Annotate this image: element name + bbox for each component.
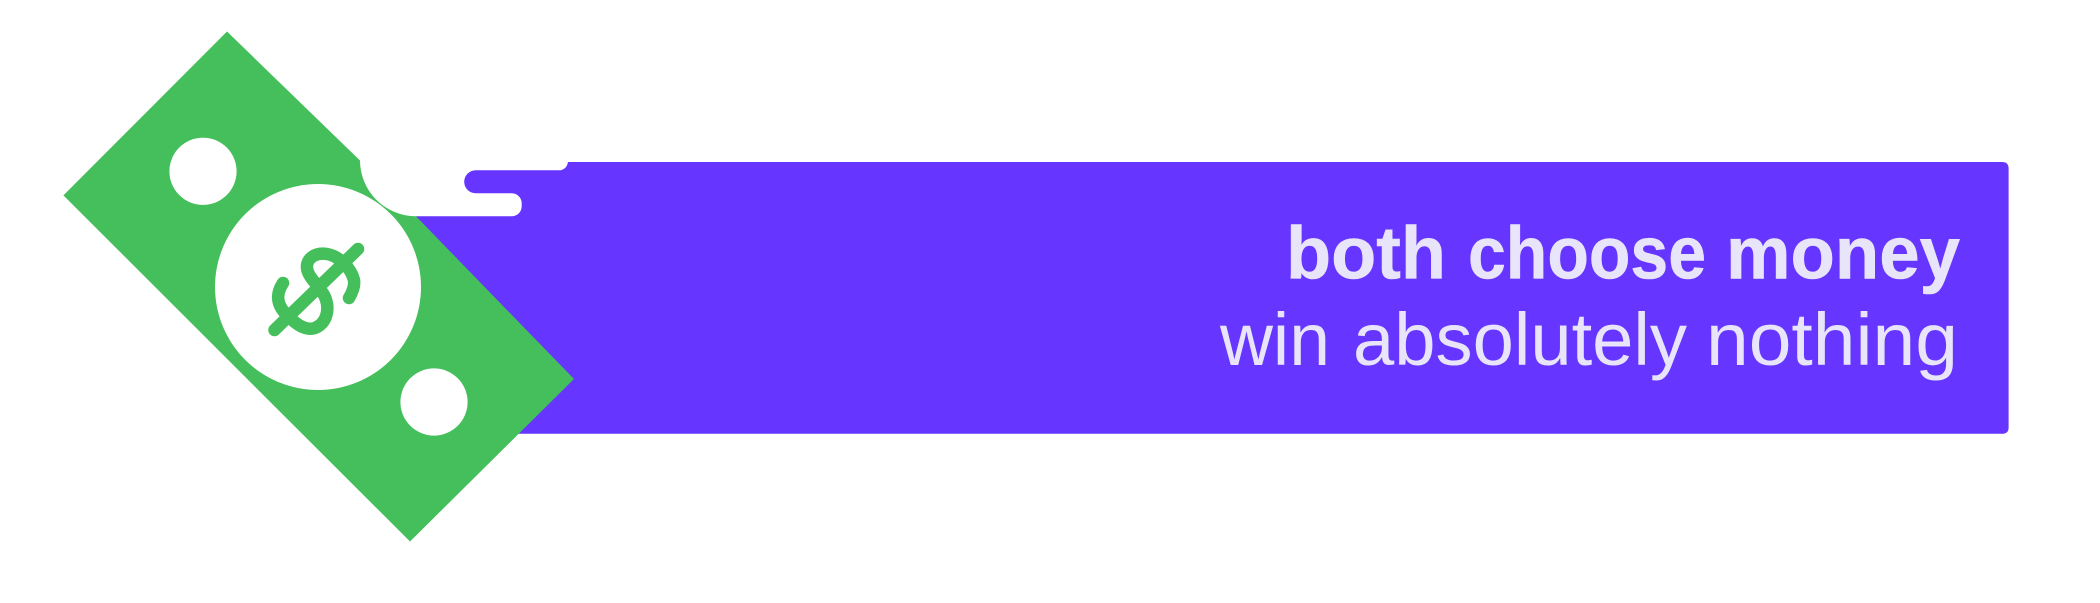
- text: win absolutely nothing: absolutely: [1353, 298, 1687, 381]
- heading: both choose money: choose: [1468, 212, 1706, 294]
- text: win absolutely nothing: win: [1219, 298, 1330, 381]
- bill small circle bottom right: [400, 368, 468, 436]
- heading: both choose money: [1286, 212, 1960, 294]
- icon: dollar bill: [63, 32, 574, 542]
- bill body: [63, 32, 574, 542]
- text: win absolutely nothing: nothing: [1706, 298, 1958, 381]
- bill large centre circle: [215, 184, 421, 390]
- heading: both choose money: money: [1726, 212, 1960, 294]
- text: win absolutely nothing: [1219, 298, 1958, 381]
- bill small circle top left: [169, 138, 237, 205]
- panel: purple outcome banner with finger notch: [416, 162, 2009, 434]
- heading: both choose money: both: [1286, 212, 1446, 294]
- dollar sign symbol: [274, 249, 358, 330]
